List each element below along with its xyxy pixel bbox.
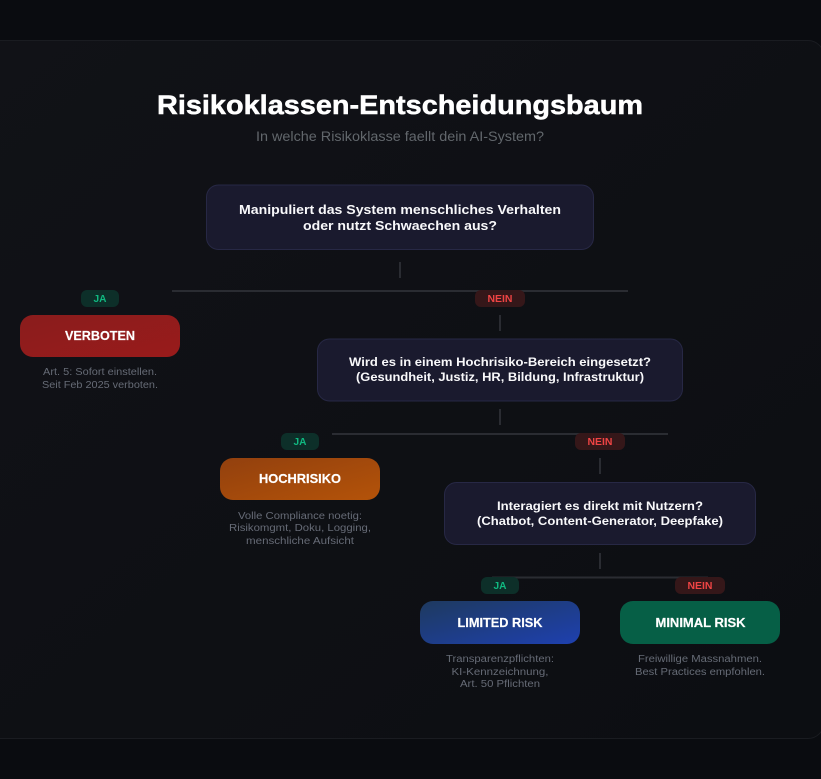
description: Limited Risk: Art. 50 Pflichten bbox=[460, 679, 540, 690]
title: Risikoklassen-Entscheidungsbaum bbox=[157, 90, 643, 120]
badge: NEIN to question 3: NEIN bbox=[588, 437, 612, 448]
subtitle: In welche Risikoklasse faellt dein AI-System? bbox=[256, 129, 544, 144]
badge: JA to Hochrisiko: JA bbox=[294, 437, 306, 448]
question 1 bbox=[206, 185, 594, 250]
result: Limited Risk bbox=[420, 601, 580, 644]
result: Hochrisiko bbox=[220, 458, 380, 500]
description: Minimal Risk: Freiwillige Massnahmen. bbox=[638, 654, 762, 665]
result: Limited Risk: LIMITED RISK bbox=[458, 615, 543, 630]
question 1: oder nutzt Schwaechen aus? bbox=[303, 218, 497, 233]
description: Hochrisiko: Volle Compliance noetig: bbox=[238, 511, 362, 522]
description: Limited Risk: KI-Kennzeichnung, bbox=[452, 667, 548, 678]
connector: question 1 branches bbox=[172, 262, 628, 331]
description: Limited Risk bbox=[446, 654, 554, 690]
description: Hochrisiko bbox=[229, 511, 371, 547]
description: Verboten bbox=[42, 367, 158, 391]
description: Verboten: Seit Feb 2025 verboten. bbox=[42, 380, 158, 391]
description: Limited Risk: Transparenzpflichten: bbox=[446, 654, 554, 665]
badge: JA to Hochrisiko bbox=[281, 433, 319, 450]
badge: NEIN to question 2: NEIN bbox=[488, 294, 512, 305]
question 1: Manipuliert das System menschliches Verhalten bbox=[239, 202, 561, 217]
badge: NEIN to Minimal Risk bbox=[675, 577, 725, 594]
question 2: Wird es in einem Hochrisiko-Bereich eingesetzt? bbox=[349, 355, 651, 369]
question 3: (Chatbot, Content-Generator, Deepfake) bbox=[477, 514, 723, 528]
description: Hochrisiko: menschliche Aufsicht bbox=[246, 536, 354, 547]
badge: NEIN to question 2 bbox=[475, 290, 525, 307]
badge: JA to Verboten: JA bbox=[94, 294, 106, 305]
connector: question 3 branches bbox=[492, 553, 708, 578]
badge: JA to Verboten bbox=[81, 290, 119, 307]
badge: NEIN to question 3 bbox=[575, 433, 625, 450]
result: Hochrisiko: HOCHRISIKO bbox=[259, 471, 341, 486]
badge: JA to Limited Risk: JA bbox=[494, 581, 506, 592]
question 3 bbox=[444, 482, 756, 544]
connector: question 2 branches bbox=[332, 409, 668, 474]
question 3: Interagiert es direkt mit Nutzern? bbox=[497, 499, 703, 513]
description: Verboten: Art. 5: Sofort einstellen. bbox=[43, 367, 157, 378]
description: Minimal Risk: Best Practices empfohlen. bbox=[635, 667, 765, 678]
result: Verboten: VERBOTEN bbox=[65, 328, 135, 343]
question 2: (Gesundheit, Justiz, HR, Bildung, Infrastruktur) bbox=[356, 370, 644, 384]
result: Minimal Risk: MINIMAL RISK bbox=[656, 615, 746, 630]
result: Verboten bbox=[20, 315, 180, 357]
description: Minimal Risk bbox=[635, 654, 765, 678]
result: Minimal Risk bbox=[620, 601, 780, 644]
question 2 bbox=[318, 339, 682, 401]
description: Hochrisiko: Risikomgmt, Doku, Logging, bbox=[229, 523, 371, 534]
badge: JA to Limited Risk bbox=[481, 577, 519, 594]
badge: NEIN to Minimal Risk: NEIN bbox=[688, 581, 712, 592]
